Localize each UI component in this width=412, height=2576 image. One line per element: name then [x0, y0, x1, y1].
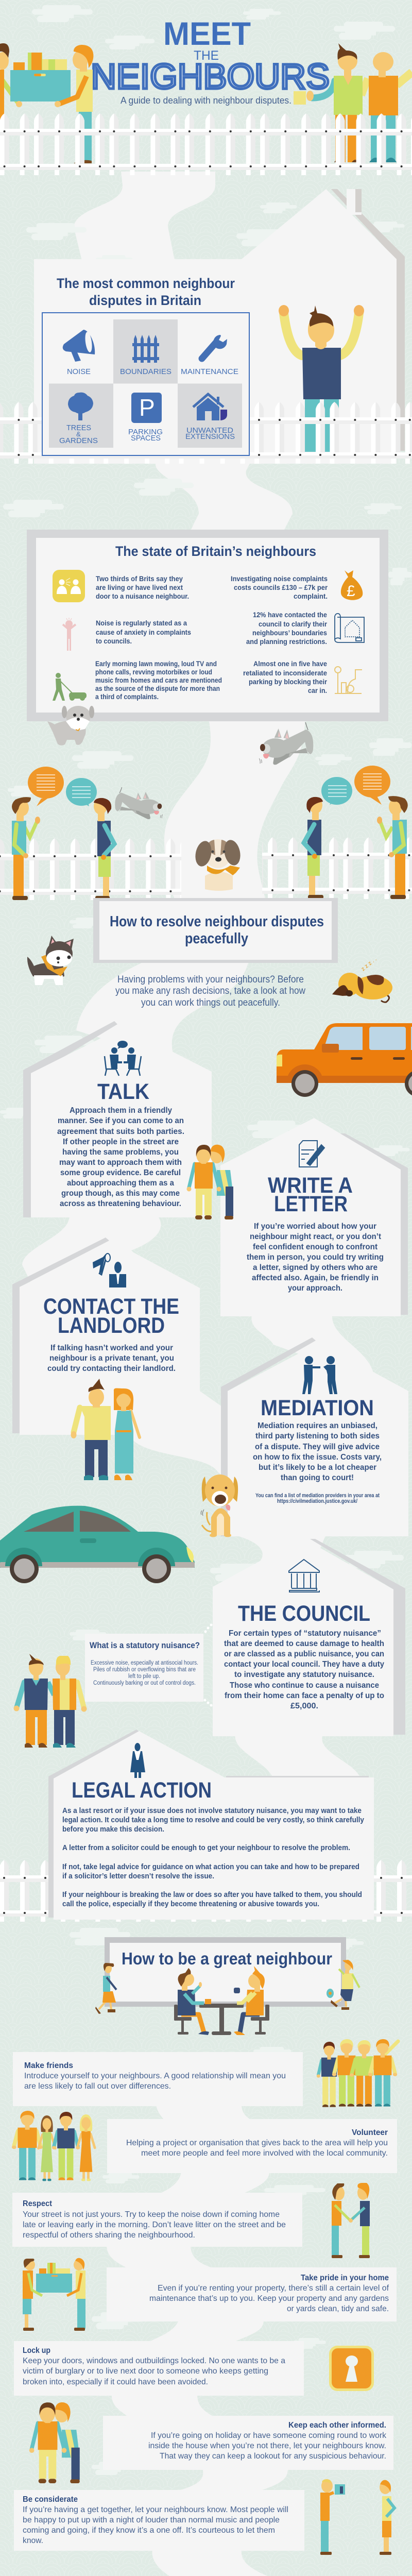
body text: if a solicitor’s letter doesn’t resolve the issue. [62, 1872, 214, 1880]
icon: money bag: £ [347, 583, 355, 600]
row: make friends: are less likely to fall out over differences. [24, 2082, 171, 2091]
row: volunteer: Helping a project or organisation that gives back to the area will help you [126, 2139, 388, 2147]
label: unwanted extensions: EXTENSIONS [185, 432, 235, 441]
body text: affected also. Again, be friendly in [252, 1274, 379, 1282]
label: parking spaces: SPACES [131, 434, 161, 443]
neighbours with a drink [294, 43, 412, 162]
speech bubble orange [28, 767, 64, 806]
heading: How to resolve neighbour disputes [110, 913, 324, 930]
teal car [0, 1506, 195, 1583]
body text: some group evidence. Be careful [60, 1168, 181, 1177]
row: be considerate: If you’re having a get together, let your neighbours know. Most people will [23, 2505, 288, 2514]
stat: parking retaliation [243, 659, 328, 694]
body text: from their home can face a penalty of up to [225, 1691, 384, 1700]
body text: may want to approach them with [59, 1158, 182, 1167]
body text: feel confident enough to confront [253, 1243, 378, 1251]
speech bubble teal [321, 777, 352, 805]
icon: parking [131, 393, 162, 423]
table [199, 2004, 244, 2035]
two men standing [13, 1654, 87, 1748]
row: keep each other informed: That way they can keep a lookout for any suspicious behaviour. [160, 2452, 386, 2461]
body text: about approaching them as a [67, 1179, 174, 1188]
row: lock up: victim of burglary or to live next door to someone who keeps getting [23, 2367, 268, 2376]
body text: but it’s likely to be a lot cheaper [259, 1463, 376, 1472]
icon: parking: P [139, 394, 155, 421]
body text [224, 1629, 384, 1710]
body text: If your neighbour is breaking the law or does so after you have talked to them, you should [62, 1891, 362, 1899]
people whispering [186, 1145, 233, 1219]
stat: boundaries: 12% have contacted the [253, 611, 327, 619]
heading: WRITE A [268, 1173, 353, 1198]
stat: lawn mowing: music from homes and cars are mentioned [95, 676, 222, 684]
stat: noise complaint cost: costs councils £130 – £7k per [234, 583, 328, 591]
title: MEET [163, 16, 251, 52]
stat: boundaries: and planning restrictions. [246, 637, 327, 646]
row: lock up: Lock up [23, 2346, 50, 2355]
body text: As a last resort or if your issue does not involve statutory nuisance, you may want to take [62, 1807, 362, 1815]
body text [62, 1807, 364, 1908]
row: be considerate: know. [23, 2536, 43, 2545]
disputes heading [57, 276, 235, 308]
dog: schnauzer [47, 706, 94, 745]
label: parking spaces [128, 428, 163, 443]
people whispering [29, 2402, 80, 2483]
row: respect [12, 2193, 302, 2247]
group of four neighbours [317, 2039, 398, 2107]
body text: legal action. It could take a long time to resolve and could be very costly, so think carefully [62, 1816, 364, 1824]
intro text: you can work things out peacefully. [141, 997, 280, 1008]
body text: group though, as this may come [61, 1189, 180, 1198]
row: be considerate: coming and going, if they know it’s a one off. It’s courteous to let them [23, 2526, 275, 2535]
neighbours carrying a box [0, 43, 93, 163]
stat: noise complaint cost: complaint. [294, 592, 328, 600]
title: NEIGHBOURS [91, 57, 330, 96]
row: be considerate [14, 2490, 304, 2551]
house panel: write a letter [220, 1118, 408, 1316]
callout: statutory nuisance: Excessive noise, especially at antisocial hours. [91, 1660, 198, 1666]
row: take pride: or yards clean, tidy and safe. [287, 2304, 389, 2313]
stat: lawn mowing: Early morning lawn mowing, loud TV and [95, 660, 217, 668]
row: keep each other informed: Keep each other informed. [288, 2421, 386, 2430]
row: respect: late or leaving early in the morning. Don’t leave litter on the street and be [23, 2221, 286, 2229]
label: trees and gardens: GARDENS [59, 436, 98, 445]
stat: lawn mowing [95, 660, 222, 701]
stat: noise complaint cost: Investigating noise complaints [231, 574, 328, 583]
heading: LEGAL ACTION [72, 1778, 212, 1803]
body text: of a dispute. They will give advice [255, 1443, 380, 1451]
stat: boundaries: council to clarify their [259, 620, 327, 628]
callout: statutory nuisance: left to pile up. [128, 1673, 160, 1680]
row: take pride: maintenance that’s up to you. Keep your property and any gardens [149, 2294, 389, 2303]
body text [47, 1344, 176, 1373]
row: make friends: Introduce yourself to your neighbours. A good relationship will mean you [24, 2072, 286, 2080]
dog: golden puppy [201, 1475, 238, 1537]
people talking right [304, 766, 408, 899]
disputes heading: disputes in Britain [89, 293, 201, 308]
icon: two people talking [105, 1041, 141, 1076]
person right [377, 796, 408, 899]
body text: For certain types of “statutory nuisance” [229, 1629, 381, 1638]
row: keep each other informed: If you’re going on holiday or have someone coming round to work [151, 2431, 387, 2440]
callout: statutory nuisance: What is a statutory nuisance? [90, 1640, 200, 1650]
neighbours shaking hands [332, 2183, 370, 2258]
person left [304, 797, 323, 899]
body text: having the same problems, you [62, 1148, 179, 1157]
heading: LANDLORD [58, 1313, 165, 1338]
couple [71, 1379, 140, 1480]
neighbours with a parcel [320, 2479, 394, 2555]
body text: call the police, especially if they become threatening or abusive towards you. [62, 1900, 319, 1908]
body text: to investigate any statutory nuisance. [234, 1670, 374, 1679]
row: volunteer: Volunteer [352, 2128, 388, 2137]
panel: state of Britain's neighbours [27, 530, 388, 721]
dog: husky [27, 936, 74, 985]
icon: tree [68, 393, 93, 420]
body text: a letter, signed by others who are [253, 1263, 377, 1272]
title [91, 16, 330, 96]
second fence [0, 402, 412, 464]
icon: judge [130, 1743, 145, 1778]
heading: CONTACT THE [43, 1294, 179, 1319]
icon: keyhole [329, 2346, 374, 2391]
icon: person mowing lawn [53, 673, 87, 701]
people talking left [12, 767, 114, 900]
panel: how to resolve disputes [93, 898, 338, 963]
stat: nuisance neighbour: Two thirds of Brits say they [96, 574, 183, 583]
orange car [277, 1023, 412, 1097]
dog: sleeping: z z z . . [360, 956, 378, 972]
icon: money bag [341, 570, 363, 600]
stat: parking retaliation: parking by blocking their [249, 677, 328, 686]
icon: house [193, 394, 227, 420]
body text: If you’re worried about how your [254, 1222, 376, 1231]
kid walking [95, 1963, 116, 2014]
icon: fence [132, 335, 159, 363]
row: make friends: Make friends [24, 2061, 73, 2070]
neighbours carrying box [23, 2258, 85, 2331]
man with raised arms [279, 305, 364, 452]
stat: noise complaint cost [231, 574, 328, 600]
stat: boundaries: neighbours’ boundaries [252, 629, 327, 637]
stat: boundaries [246, 611, 327, 646]
body text: could try contacting their landlord. [47, 1364, 176, 1373]
label: trees and gardens [59, 423, 98, 445]
callout: statutory nuisance [85, 1624, 212, 1706]
house panel: legal action [48, 1730, 374, 1920]
icon: wrench [202, 335, 227, 359]
stat: parking retaliation: car in. [308, 686, 327, 694]
icon: megaphone [63, 330, 95, 362]
stat: noise anxiety [96, 619, 191, 645]
house panel: mediation [221, 1337, 408, 1536]
body text: If not, take legal advice for guidance on what action you can take and how to be prepared [62, 1863, 359, 1871]
panel: dispute types grid [42, 313, 249, 455]
body text: across as threatening behaviour. [60, 1199, 181, 1208]
people at a table [174, 1966, 269, 2035]
body text: Approach them in a friendly [70, 1106, 172, 1115]
row: make friends [13, 2052, 303, 2106]
kid with ball [327, 1960, 359, 2010]
man right [234, 1966, 265, 2035]
intro text [115, 974, 305, 1008]
house panel: most common disputes [34, 189, 405, 464]
chairs [174, 2005, 269, 2035]
dog: running grey dog right [259, 722, 313, 765]
house panel: contact the landlord [12, 1238, 200, 1435]
stat: lawn mowing: as the source of the dispute for more than [95, 685, 220, 692]
panel: how to be a great neighbour [105, 1937, 346, 2007]
fence left [0, 838, 181, 900]
mediation providers note: You can find a list of mediation providers in your area at [255, 1493, 380, 1499]
icon: two people arguing [302, 1356, 337, 1394]
stat: nuisance neighbour: door to a nuisance neighbour. [96, 592, 189, 600]
body text: agreement that suits both parties. [57, 1127, 184, 1136]
body text: neighbour is a private tenant, you [49, 1354, 174, 1363]
body text: manner. See if you can come to an [58, 1116, 184, 1125]
label: trees and gardens: TREES [66, 423, 91, 432]
disputes heading: The most common neighbour [57, 276, 235, 291]
label: boundaries: BOUNDARIES [120, 367, 171, 376]
row: be considerate: be happy to put up with a night of louder than normal music and people [23, 2516, 280, 2524]
stat: noise anxiety: cause of anxiety in complaints [96, 628, 191, 636]
label: unwanted extensions: UNWANTED [186, 426, 233, 435]
heading: LETTER [274, 1192, 348, 1216]
row: keep each other informed [103, 2416, 393, 2470]
body text: them in person, you could try writing [247, 1253, 384, 1262]
body text: before you make this decision. [62, 1825, 164, 1834]
dog: sleeping [332, 956, 392, 1002]
stat: nuisance neighbour: are living or have lived next [96, 583, 183, 591]
body text: on how to fix the issue. Costs vary, [253, 1453, 382, 1462]
row: lock up [14, 2341, 304, 2396]
label: parking spaces: PARKING [128, 428, 163, 436]
stat: parking retaliation: Almost one in five have [253, 659, 327, 668]
body text: that are deemed to cause damage to health [224, 1639, 384, 1648]
stat: lawn mowing: a third of complaints. [95, 693, 159, 701]
heading: peacefully [185, 930, 248, 947]
row: respect: Respect [23, 2199, 53, 2208]
row: take pride: Even if you’re renting your property, there’s still a certain level of [158, 2284, 389, 2293]
body text: third party listening to both sides [255, 1432, 380, 1440]
icon: letter and pen [299, 1141, 324, 1167]
speech bubble orange [354, 766, 390, 805]
body text: £5,000. [290, 1702, 318, 1710]
row: take pride [107, 2267, 397, 2321]
row: keep each other informed: inside the house when you’re not there, let your neighbours know. [148, 2442, 386, 2450]
house panel: talk [23, 1021, 212, 1217]
icon: house plan [335, 614, 364, 642]
heading: TALK [97, 1079, 149, 1104]
body text: neighbour might react, or you don’t [250, 1232, 382, 1241]
man left [178, 1968, 211, 2035]
heading: How to be a great neighbour [122, 1949, 332, 1968]
intro text: you make any rash decisions, take a look at how [115, 986, 305, 996]
heading [110, 913, 324, 947]
label: trees and gardens: & [76, 430, 81, 438]
body text: Mediation requires an unbiased, [258, 1421, 377, 1430]
body text: Those who continue to cause a nuisance [230, 1681, 379, 1690]
row: respect: respectful of others sharing the neighbourhood. [23, 2231, 195, 2240]
stat: nuisance neighbour [96, 574, 189, 600]
stat: lawn mowing: phone calls, revving motorbikes or loud [95, 668, 212, 676]
row: take pride: Take pride in your home [301, 2274, 389, 2282]
house panel: the council [213, 1538, 405, 1736]
stat: noise anxiety: Noise is regularly stated as a [96, 619, 187, 627]
icon: parking and car [335, 667, 362, 693]
heading [43, 1294, 179, 1338]
person right [94, 798, 114, 900]
label: maintenance: MAINTENANCE [181, 367, 238, 376]
mediation providers note: https://civilmediation.justice.gov.uk/ [277, 1498, 357, 1504]
heading: MEDIATION [261, 1396, 374, 1420]
subtitle: A guide to dealing with neighbour disputes. [121, 95, 291, 106]
intro text: Having problems with your neighbours? Before [117, 974, 304, 985]
fence right [262, 837, 412, 899]
mediation providers note [255, 1493, 380, 1504]
body text [247, 1222, 384, 1293]
row: lock up: broken into, especially if it could have been avoided. [23, 2378, 208, 2386]
body text [253, 1421, 382, 1482]
body text: A letter from a solicitor could be enough to get your neighbour to resolve the problem. [62, 1844, 350, 1852]
title: THE [194, 48, 219, 63]
heading: THE COUNCIL [238, 1601, 370, 1626]
icon: two people arguing [53, 570, 85, 602]
row: be considerate: Be considerate [23, 2495, 78, 2504]
heading: The state of Britain’s neighbours [115, 544, 316, 559]
body text: or are classed as a public nuisance, you can [224, 1650, 384, 1658]
group of four neighbours with women [12, 2111, 95, 2181]
speech bubble teal [66, 778, 97, 806]
label: unwanted extensions [185, 426, 235, 441]
body text: If other people in the street are [63, 1138, 179, 1146]
fence behind legal action [0, 1860, 412, 1922]
icon: keys and landlord [93, 1253, 126, 1287]
dog: sitting puppy with scarf [193, 838, 243, 891]
body text: contact your local council. They have a duty [224, 1660, 384, 1669]
heading [268, 1173, 353, 1216]
body text: than going to court! [281, 1473, 354, 1482]
row: respect: Your street is not just yours. Try to keep the noise down if coming home [23, 2210, 280, 2219]
body text [57, 1106, 184, 1208]
callout: statutory nuisance: Piles of rubbish or overflowing bins that are [93, 1667, 196, 1673]
dog: running grey dog left [115, 787, 163, 819]
body text: If talking hasn’t worked and your [50, 1344, 173, 1352]
stat: parking retaliation: retaliated to inconsiderate [243, 669, 327, 677]
callout: statutory nuisance: Continuously barking or out of control dogs. [93, 1680, 196, 1686]
row: volunteer: meet more people and feel more involved with the local community. [141, 2149, 388, 2158]
icon: stressed person [63, 618, 76, 651]
label: noise: NOISE [67, 367, 91, 376]
person left [12, 797, 40, 900]
body text: your approach. [288, 1284, 342, 1293]
picket fence [0, 113, 412, 175]
row: lock up: Keep your doors, windows and outbuildings locked. No one wants to be a [23, 2357, 285, 2365]
row: volunteer [107, 2119, 397, 2173]
icon: council building [289, 1560, 319, 1592]
stat: noise anxiety: to councils. [96, 637, 132, 645]
